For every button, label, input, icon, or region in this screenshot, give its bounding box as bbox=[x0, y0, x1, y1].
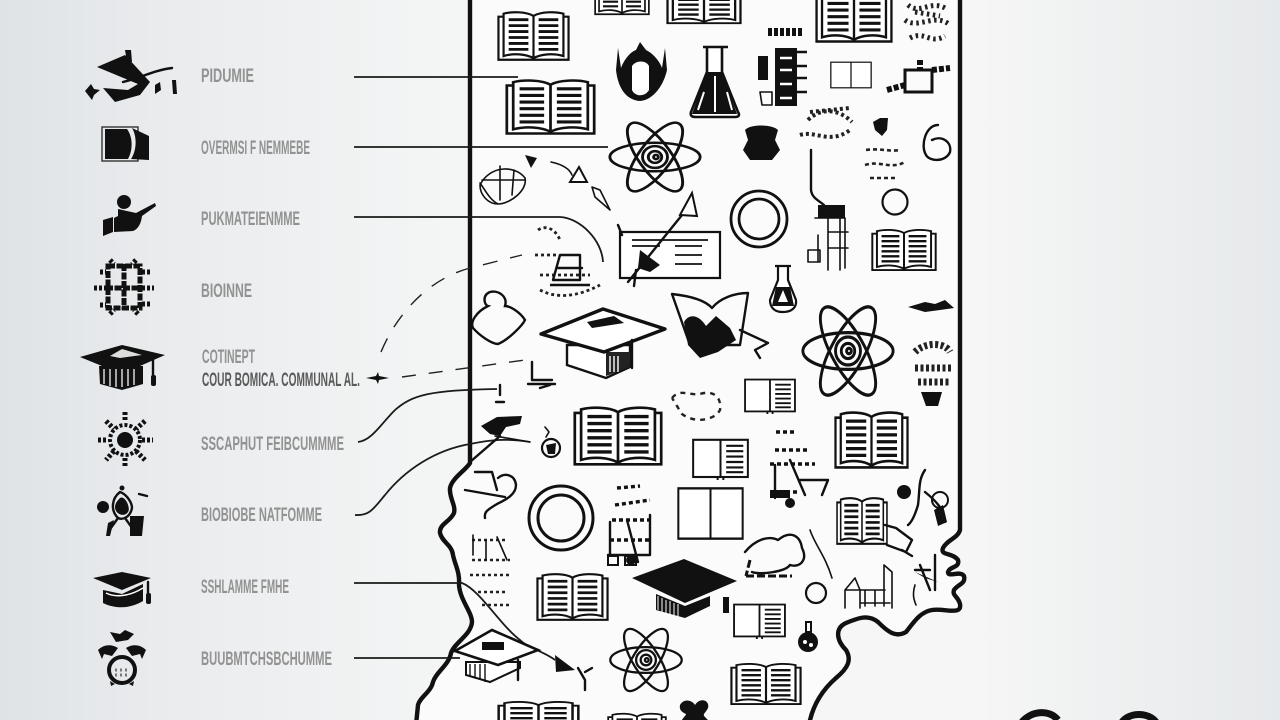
icon: drop and figures bbox=[97, 486, 147, 536]
label: row 9: BUUBMTCHSBCHUMME bbox=[201, 649, 332, 670]
doodle: open fan book with flowers bbox=[672, 293, 768, 358]
icon: graduation cap bbox=[80, 345, 165, 390]
map outline with state silhouette bbox=[416, 0, 964, 720]
label: row 5 heading: COTINEPT bbox=[202, 347, 255, 368]
icon: snowflake rosette bbox=[98, 412, 153, 468]
icon: solid graduation cap bbox=[93, 572, 151, 607]
scatter of open books bbox=[498, 0, 936, 720]
cap: solid cap bbox=[632, 559, 737, 618]
cap: outlined centre cap bbox=[541, 309, 665, 378]
doodle: helmet emblem bbox=[616, 42, 667, 101]
doodle: rabbit-like machine bbox=[745, 530, 832, 578]
doodle: machine column bbox=[758, 32, 807, 106]
doodle: hammer and basket bbox=[465, 472, 516, 518]
doodle: black tree on border bbox=[470, 385, 530, 462]
label: row 8: SSHLAMME FMHE bbox=[201, 577, 289, 598]
doodle: column machine centre bbox=[608, 486, 654, 565]
doodle: black cross blob bbox=[680, 700, 710, 720]
doodle: triangle arrow bbox=[525, 155, 610, 210]
legend column bbox=[80, 50, 360, 686]
doodle: certificate with arrow bbox=[618, 193, 720, 286]
doodle: dotted temple bbox=[535, 228, 600, 295]
label: row 4: BIOINNE bbox=[201, 281, 252, 302]
leader lines and dashed connectors bbox=[354, 77, 608, 660]
icon: speckled window grid bbox=[94, 260, 154, 314]
doodle: beetle bbox=[743, 126, 780, 160]
doodle: frame and wings bbox=[887, 60, 950, 92]
sketchy lab and campus doodles bbox=[465, 5, 954, 720]
doodle: bird and balloon bbox=[897, 470, 948, 526]
icon: dark box bbox=[102, 127, 149, 161]
doodle: folded page by book bbox=[885, 525, 912, 556]
doodle: dotted cluster top right bbox=[905, 5, 950, 39]
doodle: dotted tower left bbox=[470, 535, 510, 605]
doodle: ring knot bbox=[472, 292, 525, 344]
graduation caps bbox=[455, 309, 737, 682]
doodle: pen nib and sprig bbox=[555, 655, 592, 690]
flasks bbox=[691, 47, 818, 652]
doodle: potted plant bbox=[915, 344, 952, 406]
atoms bbox=[610, 116, 893, 697]
partial emblem at bottom right bbox=[1022, 713, 1156, 720]
cap: small cap on border bbox=[455, 630, 538, 682]
doodle: globe bbox=[480, 166, 525, 204]
label: row 5 detail: COUR BOMICA. COMMUNAL AL. bbox=[202, 370, 360, 391]
icon: broken graduation cap bbox=[85, 50, 177, 102]
doodle: bat silhouette bbox=[908, 300, 954, 312]
doodle: dashed loop bbox=[672, 393, 720, 420]
label: row 1: PIDUMIE bbox=[201, 66, 254, 87]
rings bbox=[529, 190, 908, 603]
icon: clock with foliage bbox=[98, 630, 146, 686]
doodle: campus building bbox=[845, 565, 892, 608]
label: row 6: SSCAPHUT FEIBCUMMME bbox=[201, 434, 344, 455]
icon: person with pointer bbox=[103, 195, 156, 236]
doodle: moth and squiggles bbox=[865, 118, 950, 178]
doodle: small plant right bbox=[913, 555, 945, 605]
doodle: tiny bulb bbox=[542, 427, 560, 457]
label: row 7: BIOBIOBE NATFOMME bbox=[201, 505, 322, 526]
doodle: small desk bbox=[528, 362, 555, 388]
doodle: column machine right bbox=[770, 432, 828, 508]
label: row 2: OVERMSI F NEMMEBE bbox=[201, 138, 310, 159]
doodle: tree and machine bbox=[800, 108, 852, 270]
label: row 3: PUKMATEIENMME bbox=[201, 209, 300, 230]
